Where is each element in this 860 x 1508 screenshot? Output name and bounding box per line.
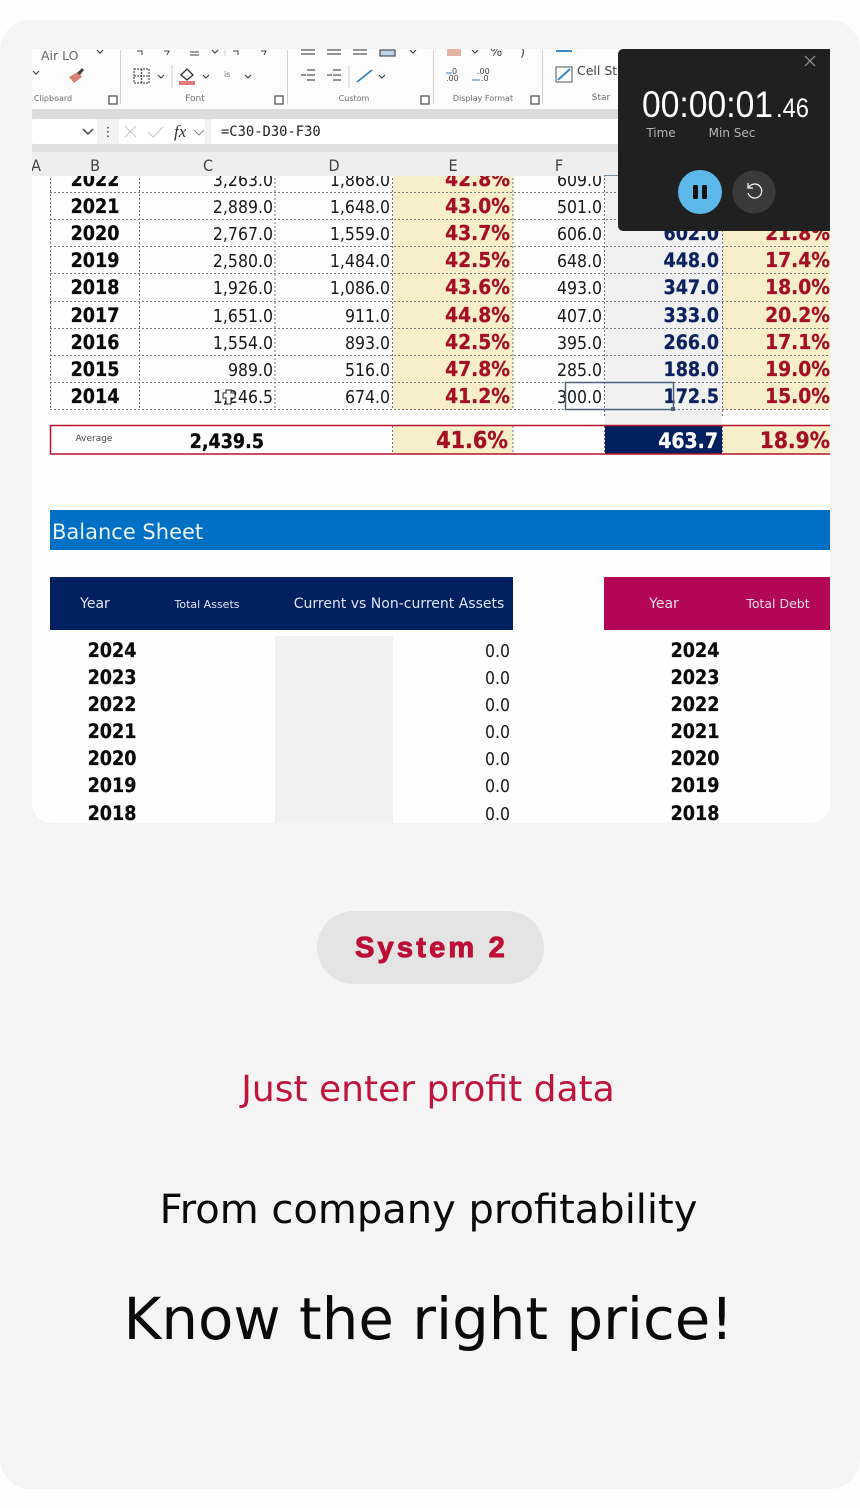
formula bar <box>32 119 621 144</box>
row 2018: 493.0 <box>557 279 602 299</box>
row 2020: 43.7% <box>445 221 510 245</box>
balance sheet rows: 2024 <box>88 639 136 662</box>
icon: number format: % <box>490 45 502 60</box>
icon: number format: .0 <box>481 74 489 83</box>
column headers: A <box>31 156 41 175</box>
row 2015 <box>72 360 830 376</box>
column headers: B <box>90 156 100 175</box>
row 2022: 2022 <box>71 168 119 191</box>
balance sheet rows: 0.0 <box>485 669 510 689</box>
icon: borders <box>134 69 149 83</box>
icon: number format: .00 <box>477 67 490 76</box>
row 2014: 2014 <box>71 385 119 408</box>
row 2018: 18.0% <box>765 275 830 299</box>
stopwatch widget: Min Sec <box>709 126 755 140</box>
column headers: F <box>555 156 563 175</box>
row 2016: 2016 <box>71 331 119 354</box>
row 2016: 1,554.0 <box>213 334 273 354</box>
row 2017: 1,651.0 <box>213 307 273 327</box>
formula bar: =C30-D30-F30 <box>221 124 321 140</box>
balance sheet rows: 2018 <box>88 802 136 825</box>
formula bar: fx <box>174 122 187 141</box>
row 2017: 407.0 <box>557 307 602 327</box>
balance sheet rows: 0.0 <box>485 642 510 662</box>
heading: just enter profit data: Just enter profit data <box>239 1069 615 1110</box>
balance table header: navy: Year <box>79 596 110 612</box>
average row: 463.7 <box>658 429 718 453</box>
column headers: E <box>448 156 458 175</box>
column headers: C <box>203 156 213 175</box>
icon: alignment rows <box>301 50 395 80</box>
average row: 41.6% <box>436 428 508 454</box>
balance table header: magenta <box>604 577 830 630</box>
balance table header: navy: Current vs Non-current Assets <box>294 596 504 612</box>
row 2019: 1,484.0 <box>330 252 390 272</box>
column headers: D <box>328 156 340 175</box>
balance sheet banner: Balance Sheet <box>52 520 203 544</box>
icon: reset button <box>732 170 776 214</box>
row 2017: 333.0 <box>664 304 719 327</box>
excel ribbon toolbar <box>32 49 618 152</box>
balance table header: navy: Total Assets <box>174 598 240 611</box>
excel ribbon toolbar: Air LO <box>41 48 79 63</box>
column headers <box>32 152 618 177</box>
row 2019: 448.0 <box>664 249 719 272</box>
row 2018: 347.0 <box>664 276 719 299</box>
balance sheet rows: 0.0 <box>485 696 510 716</box>
row 2022 <box>72 176 601 188</box>
row 2015: 285.0 <box>557 361 602 381</box>
balance sheet rows: 0.0 <box>485 777 510 797</box>
excel ribbon toolbar: Clipboard <box>34 94 72 103</box>
row 2017 <box>72 306 830 324</box>
excel ribbon toolbar: Cell St <box>577 63 617 78</box>
panel: spreadsheet screenshot <box>31 45 838 825</box>
formula bar: ⋮ <box>102 125 114 140</box>
row 2021: 2,889.0 <box>213 198 273 218</box>
row 2019: 42.5% <box>445 248 510 272</box>
excel ribbon toolbar: Display Format <box>453 94 513 103</box>
icon: number format: .00 <box>446 74 459 83</box>
balance sheet rows: 2018 <box>671 802 719 825</box>
row 2015: 2015 <box>71 358 119 381</box>
row 2022: 3,263.0 <box>213 171 273 191</box>
excel ribbon toolbar: is <box>224 70 230 79</box>
balance table header: magenta: Total Debt <box>745 596 810 611</box>
row 2021: 501.0 <box>557 198 602 218</box>
row 2015: 188.0 <box>664 358 719 381</box>
balance sheet rows: 2023 <box>88 666 136 689</box>
row 2019: 2019 <box>71 249 119 272</box>
row 2018: 1,086.0 <box>330 279 390 299</box>
income data table <box>50 165 830 425</box>
icon: close <box>805 56 815 66</box>
balance sheet banner <box>50 510 830 550</box>
row 2017: 20.2% <box>765 303 830 327</box>
row 2022: 1,868.0 <box>330 171 390 191</box>
icon: number format <box>446 49 524 81</box>
average row: Average <box>76 434 113 444</box>
excel ribbon toolbar: Star <box>592 93 611 103</box>
row 2016: 893.0 <box>345 334 390 354</box>
row 2019: 648.0 <box>557 252 602 272</box>
row 2018: 43.6% <box>445 275 510 299</box>
elapsed time: 00:00:01 <box>642 84 773 125</box>
dialog launchers <box>109 96 539 104</box>
balance sheet rows: 0.0 <box>485 750 510 770</box>
balance sheet rows: 2019 <box>671 774 719 797</box>
row 2019 <box>72 252 830 269</box>
row 2022: 609.0 <box>557 171 602 191</box>
elapsed time: .46 <box>776 93 809 123</box>
row 2016: 266.0 <box>664 331 719 354</box>
row 2020: 21.8% <box>765 221 830 245</box>
row 2015: 19.0% <box>765 357 830 381</box>
balance sheet rows <box>88 639 719 825</box>
average row: 18.9% <box>760 428 830 454</box>
row 2021 <box>72 198 601 215</box>
row 2020: 606.0 <box>557 225 602 245</box>
icon: number format: ) <box>520 45 525 60</box>
average row: 2,439.5 <box>190 430 264 453</box>
balance sheet rows: 2021 <box>88 720 136 743</box>
balance sheet rows: 2019 <box>88 774 136 797</box>
row 2020: 2020 <box>71 222 119 245</box>
row 2021: 2021 <box>71 195 119 218</box>
average row <box>50 426 830 454</box>
row 2019: 17.4% <box>765 248 830 272</box>
icon: ribbon top arrows <box>137 51 266 55</box>
row 2019: 2,580.0 <box>213 252 273 272</box>
row 2015: 516.0 <box>345 361 390 381</box>
balance sheet rows: 2020 <box>88 747 136 770</box>
row 2020 <box>72 224 830 242</box>
row 2014: 1,246.5 <box>213 388 273 408</box>
row 2020: 602.0 <box>664 222 719 245</box>
row 2016: 17.1% <box>765 330 830 354</box>
row 2018 <box>72 278 830 296</box>
icon: cell styles <box>556 51 572 82</box>
row 2014: 41.2% <box>445 384 510 408</box>
time labels: Time <box>645 126 676 140</box>
icon: excel cross cursor <box>223 390 235 404</box>
row 2018: 1,926.0 <box>213 279 273 299</box>
badge: System 2 <box>317 911 544 984</box>
row 2014: 15.0% <box>765 384 830 408</box>
row 2017: 44.8% <box>445 303 510 327</box>
balance sheet rows: 2020 <box>671 747 719 770</box>
balance sheet rows: 2023 <box>671 666 719 689</box>
icon: orientation <box>357 70 372 82</box>
elapsed time <box>643 91 808 118</box>
row 2018: 2018 <box>71 276 119 299</box>
badge: System 2: System 2 <box>355 932 508 964</box>
balance sheet rows: 2022 <box>671 693 719 716</box>
dropdown chevrons <box>33 50 478 78</box>
row 2015: 989.0 <box>228 361 273 381</box>
balance sheet rows: 0.0 <box>485 723 510 743</box>
row 2017: 2017 <box>71 304 119 327</box>
stopwatch widget <box>618 49 838 231</box>
row 2016: 395.0 <box>557 334 602 354</box>
balance sheet rows: 0.0 <box>485 805 510 825</box>
row 2020: 2,767.0 <box>213 225 273 245</box>
balance sheet rows: 2022 <box>88 693 136 716</box>
grey balance column <box>275 636 393 823</box>
row 2014: 172.5 <box>664 385 719 408</box>
grey column continuation <box>605 416 722 424</box>
balance sheet rows: 2024 <box>671 639 719 662</box>
icon: format painter <box>69 68 84 83</box>
excel ribbon toolbar: Custom <box>339 94 370 103</box>
icon: pause button <box>678 170 722 214</box>
row 2014 <box>72 388 830 405</box>
row 2021: 1,648.0 <box>330 198 390 218</box>
row 2016: 42.5% <box>445 330 510 354</box>
row 2021: 43.0% <box>445 194 510 218</box>
row 2022: 42.8% <box>445 167 510 191</box>
row 2017: 911.0 <box>345 307 390 327</box>
balance table header: navy <box>50 577 513 630</box>
icon: number format: 0 <box>452 67 457 76</box>
row 2015: 47.8% <box>445 357 510 381</box>
excel ribbon toolbar: Font <box>185 94 205 104</box>
icon: fill colour <box>179 69 195 85</box>
row 2014: 300.0 <box>557 388 602 408</box>
row 2014: 674.0 <box>345 388 390 408</box>
selected cell outline <box>566 382 675 411</box>
balance table header: magenta: Year <box>648 596 679 612</box>
balance sheet rows: 2021 <box>671 720 719 743</box>
headline: know the right price: Know the right price! <box>124 1285 733 1353</box>
text: from company profitability: From company profitability <box>160 1187 697 1233</box>
row 2016 <box>72 334 830 351</box>
row 2020: 1,559.0 <box>330 225 390 245</box>
